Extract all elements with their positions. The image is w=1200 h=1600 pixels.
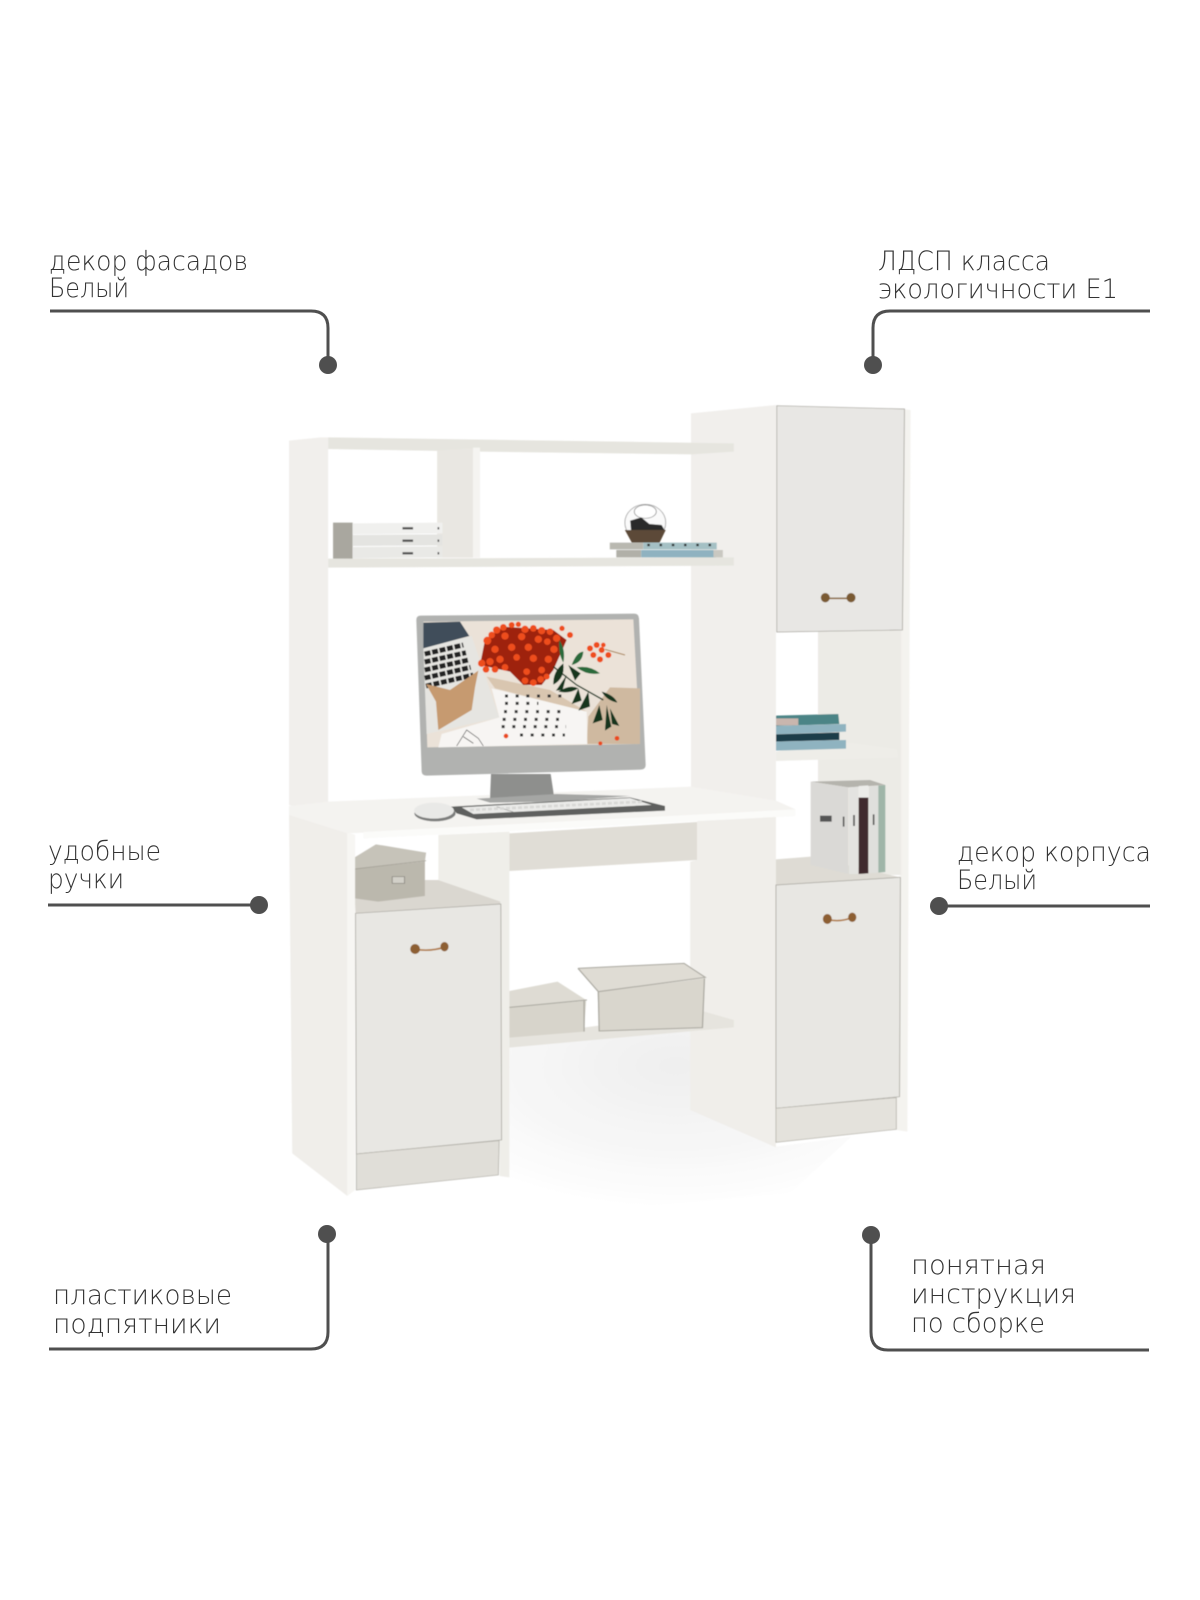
callout: декор корпуса <box>930 837 1151 915</box>
tower back wall <box>818 630 902 875</box>
label: удобные ручки: ручки <box>48 864 124 895</box>
right tower <box>691 405 776 802</box>
leader line <box>50 311 328 365</box>
lower shelf <box>509 1012 734 1048</box>
marker dot <box>930 897 948 915</box>
desktop <box>289 787 796 838</box>
left door <box>356 904 502 1154</box>
label: понятная инструкция по сборке: инструкция <box>911 1279 1076 1310</box>
desk illustration <box>289 405 911 1210</box>
label: удобные ручки: удобные <box>48 836 161 867</box>
callout: ЛДСП класса экологичности Е1 <box>864 246 1150 374</box>
left upright <box>289 437 328 814</box>
label: ЛДСП <box>878 246 1118 305</box>
label: ЛДСП: экологичности Е1 <box>878 274 1118 305</box>
left front edge <box>347 833 355 1196</box>
callout: понятная инструкция <box>862 1226 1149 1350</box>
white books on shelf <box>333 523 442 559</box>
tower shelf with books <box>776 714 898 874</box>
pins <box>504 734 619 745</box>
leaf drawing <box>457 730 483 746</box>
left side panel <box>289 810 347 1196</box>
label: декор корпуса Белый: Белый <box>957 865 1037 896</box>
marker dot <box>862 1226 880 1244</box>
label: декор корпуса Белый: декор корпуса <box>957 837 1151 868</box>
divider <box>437 448 480 558</box>
label: декор фасадов Белый: Белый <box>49 273 129 304</box>
horizontal books <box>776 714 846 751</box>
marker dot <box>250 896 268 914</box>
middle shelf <box>328 557 734 568</box>
terrarium <box>625 504 666 543</box>
berry bunch <box>478 622 625 686</box>
paper envelope <box>426 671 478 730</box>
desktop surface <box>289 787 796 838</box>
marker dot <box>864 356 882 374</box>
lower part of desk <box>289 409 911 1210</box>
label: понятная инструкция по сборке <box>911 1250 1076 1339</box>
label: удобные ручки <box>48 836 161 895</box>
left cabinet top <box>355 880 500 914</box>
label: ЛДСП: ЛДСП класса <box>878 246 1050 277</box>
leader line <box>49 1234 328 1349</box>
label: понятная инструкция по сборке: понятная <box>911 1250 1046 1281</box>
label: декор фасадов Белый: декор фасадов <box>49 246 248 277</box>
shelf <box>776 743 898 761</box>
upper part of desk <box>289 405 904 814</box>
monitor <box>414 614 665 821</box>
mouse <box>414 803 456 821</box>
floor shadow <box>500 1030 851 1210</box>
screen photo <box>423 619 640 747</box>
callout: удобные ручки <box>48 836 268 914</box>
modesty panel <box>509 822 697 871</box>
right door <box>776 877 900 1108</box>
right tower side <box>690 817 776 1147</box>
marker dot <box>319 356 337 374</box>
left compartment box <box>355 844 426 902</box>
storage boxes <box>509 963 705 1038</box>
keyboard <box>451 797 665 819</box>
leader line <box>939 904 1150 908</box>
callout: декор фасадов <box>49 246 337 374</box>
label: декор фасадов Белый <box>49 246 248 304</box>
laptop <box>423 622 499 734</box>
calendar paper <box>438 688 587 747</box>
right plinth <box>776 1098 896 1142</box>
calendar dates <box>502 696 567 735</box>
right cabinet top <box>776 857 900 885</box>
leader line <box>871 1235 1149 1350</box>
desktop front edge <box>364 809 796 838</box>
label: пластиковые подпятники <box>53 1280 232 1340</box>
handle: right door <box>823 913 856 924</box>
callout: пластиковые подпятники <box>49 1225 336 1349</box>
green leaves <box>553 640 619 731</box>
monitor bezel <box>416 614 646 776</box>
label: декор корпуса Белый <box>957 837 1151 896</box>
top shelf <box>328 437 734 454</box>
upper door <box>777 406 904 632</box>
upright books <box>811 780 885 874</box>
label: пластиковые подпятники: подпятники <box>53 1309 221 1340</box>
monitor stand <box>490 774 554 799</box>
label: пластиковые подпятники: пластиковые <box>53 1280 232 1311</box>
left plinth <box>356 1141 499 1190</box>
label: понятная инструкция по сборке: по сборке <box>911 1308 1045 1339</box>
middle left panel <box>438 832 509 1177</box>
leader line <box>48 904 259 906</box>
leader line <box>873 311 1150 365</box>
handle: upper door <box>821 593 856 602</box>
handle: left door <box>410 942 449 954</box>
right outer panel <box>896 409 911 1132</box>
books under terrarium <box>610 543 723 557</box>
marker dot <box>318 1225 336 1243</box>
